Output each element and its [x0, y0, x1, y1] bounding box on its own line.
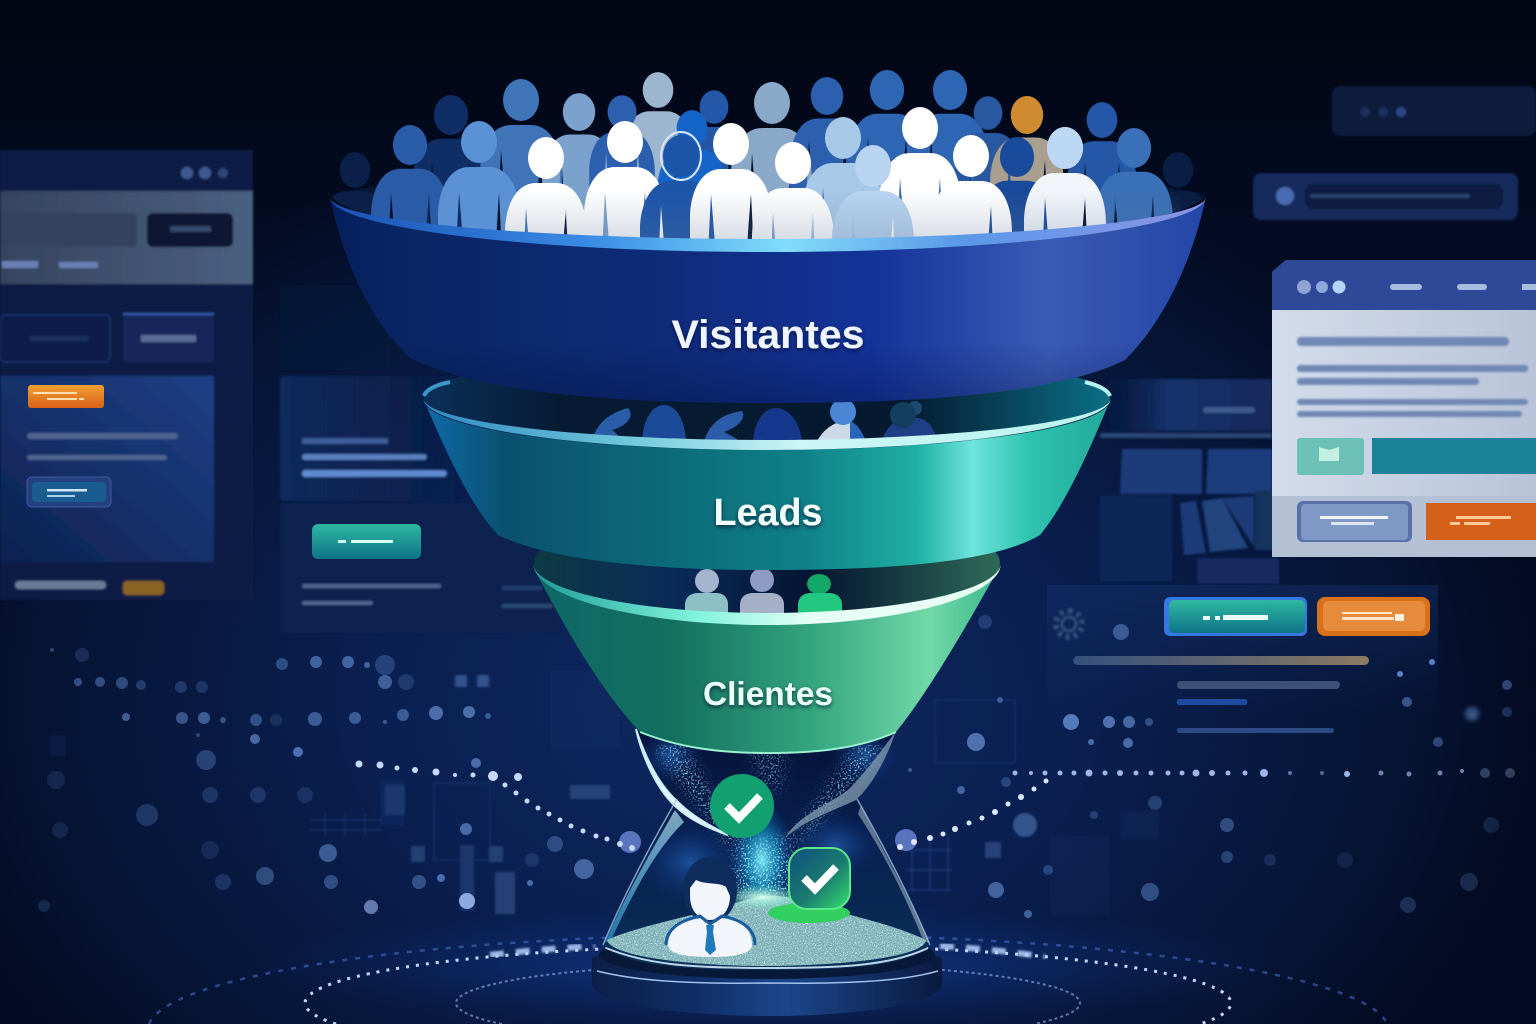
right rim back curve — [1085, 382, 1110, 396]
decorative: bokeh dots left — [38, 648, 594, 914]
people inside Clientes stage — [685, 569, 842, 613]
panel: dark card behind funnel right — [1100, 379, 1279, 584]
panel: search bar — [1253, 173, 1518, 220]
icon: businessman — [666, 857, 755, 957]
glass glow upper left — [636, 725, 704, 785]
bowl interior — [332, 173, 1204, 221]
funnel body Visitantes — [330, 197, 1206, 403]
hourglass base — [592, 931, 942, 1016]
network: dotted left arc — [356, 760, 635, 851]
people inside Leads stage — [594, 401, 936, 440]
label Leads: Leads — [714, 492, 822, 534]
funnel body shading — [330, 197, 1206, 403]
button: teal — [312, 524, 421, 559]
platform rings — [149, 934, 1387, 1024]
label Visitantes: Visitantes — [672, 313, 864, 357]
icon: gear — [1056, 611, 1082, 637]
button: orange toolbar — [1317, 597, 1430, 636]
icon: round check badge — [710, 774, 774, 838]
rim Leads — [423, 398, 1111, 450]
crowd — [332, 70, 1202, 239]
window dots — [181, 167, 228, 179]
funnel stage: Clientes — [533, 550, 1001, 754]
rim Visitantes — [330, 197, 1206, 252]
icon: green check person — [768, 848, 850, 923]
funnel bottom lip — [640, 732, 896, 753]
button: left blue — [27, 477, 111, 507]
glass dome glow right — [787, 811, 883, 879]
glass glow upper right — [831, 721, 899, 789]
glass bottom lip — [606, 948, 928, 968]
orange head — [1011, 96, 1043, 134]
particles — [655, 745, 885, 900]
network: dotted right arc — [897, 778, 1048, 850]
rim Clientes — [533, 563, 1001, 625]
button: left orange — [28, 385, 104, 408]
funnel stage: Visitantes — [320, 70, 1213, 403]
glass dome glow left — [638, 820, 742, 904]
button: teal toolbar — [1164, 597, 1307, 636]
panel: lower-right toolbar — [1047, 585, 1438, 733]
network: dotted horizontal line — [1012, 768, 1515, 778]
panel: top-right pill — [1332, 86, 1536, 136]
glass highlights — [603, 729, 930, 945]
left rim back curve — [424, 382, 450, 396]
funnel body Clientes — [533, 566, 1000, 753]
decorative: bokeh dots right — [619, 615, 1512, 918]
white ring head — [661, 132, 701, 180]
hourglass — [592, 721, 942, 1016]
panel: white browser window — [1272, 260, 1536, 557]
label Clientes: Clientes — [703, 675, 833, 712]
funnel body Leads — [424, 400, 1110, 570]
sand peak glow — [718, 884, 806, 910]
panel: middle-left card — [280, 285, 560, 633]
funnel stage: Leads — [423, 350, 1111, 570]
sand stream glow — [730, 802, 794, 918]
blocks: city backdrop — [50, 670, 1160, 915]
sand — [607, 896, 926, 966]
panel: left dashboard window — [0, 150, 253, 600]
hourglass glass — [603, 727, 930, 970]
pale blue head — [1047, 127, 1083, 169]
